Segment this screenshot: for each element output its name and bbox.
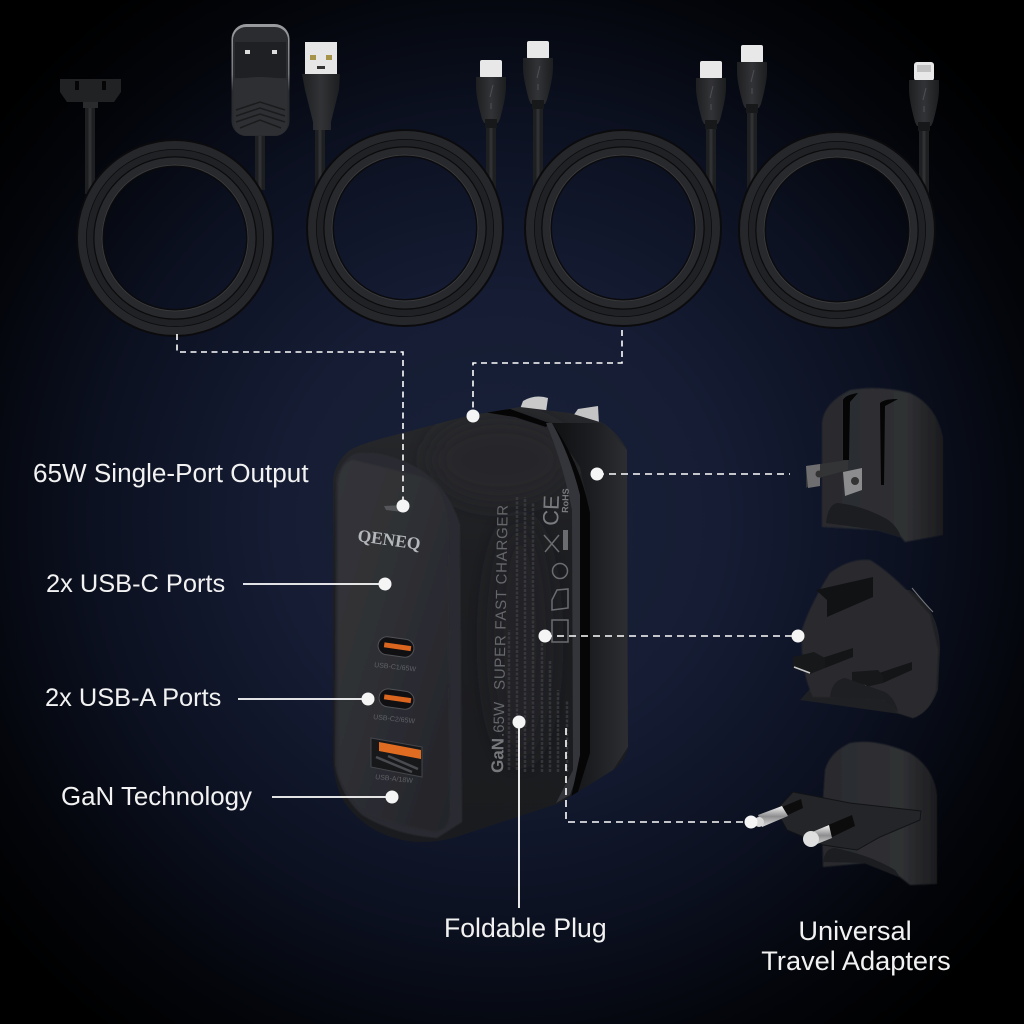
groove [483,409,549,427]
connector: foldable prong to cable 3 [473,330,622,416]
front panel [338,460,450,832]
side text [488,505,512,773]
USB-A port [371,738,422,777]
cable 1: flat connector and clip [60,24,290,331]
icon: USB-A plug [302,42,340,130]
label: Universal Travel Adapters: Travel Adapters [761,945,951,976]
label: 2x USB-A Ports: 2x USB-A Ports [45,684,221,712]
icon: charging clip connector [232,24,290,190]
spec text lines [509,497,567,772]
CE mark: CE [538,495,564,526]
label: Universal Travel Adapters [761,915,951,976]
icon: USB-C plug [476,60,506,128]
icon: flat magnetic connector [60,79,121,194]
body shading [487,409,628,803]
icon: Lightning plug [909,62,939,131]
USB-C port 2 label: USB-C2/65W [373,714,416,725]
connector: to EU adapter [566,728,751,822]
front bezel [335,453,462,838]
connector: USB-A ports [238,698,368,700]
USB-C port 2 [378,688,415,710]
certification marks [544,530,568,642]
connector: USB-C ports [243,583,385,585]
side text: GaN [488,738,508,773]
icon: USB-C plug [696,61,726,129]
logo: QENEQ [356,525,422,554]
coil [744,137,930,323]
coil [530,135,716,321]
rear section [550,423,628,793]
label: Foldable Plug: Foldable Plug [444,913,607,943]
adapter: EU [754,742,937,885]
USB-A port label: USB-A/18W [375,774,413,785]
adapter: US [806,388,943,542]
pins [754,799,855,847]
label: GaN Technology: GaN Technology [61,783,252,811]
connector: foldable plug [518,722,520,908]
connector: GaN technology [272,796,392,798]
label: 2x USB-C Ports: 2x USB-C Ports [46,570,225,598]
USB-C port 1 label: USB-C1/65W [374,662,417,673]
light band [546,423,580,803]
LED indicator [384,505,403,512]
adapter: UK [793,560,940,718]
label: 65W Single-Port Output: 65W Single-Port Output [33,458,309,488]
cable 4: USB-C to Lightning [737,45,939,323]
RoHS mark: RoHS [560,488,571,513]
coil [82,145,268,331]
cable 3: USB-C to USB-C [523,41,726,321]
callout dots [362,410,804,828]
coil [312,135,498,321]
prong tips [520,397,599,424]
icon: USB-C plug [523,41,553,109]
cable 2: USB-A to USB-C [302,42,506,321]
connector: to UK adapter [545,635,798,637]
charger body [333,407,628,842]
label: Universal Travel Adapters: Universal [798,915,912,946]
USB-C port 1 [377,636,415,658]
icon: USB-C plug [737,45,767,113]
connector: to US adapter [597,473,790,475]
side text: SUPER FAST CHARGER [491,505,512,690]
side text: .65W [491,701,508,737]
charger [333,397,628,842]
connector: 65W output to cable 1 [177,334,403,506]
